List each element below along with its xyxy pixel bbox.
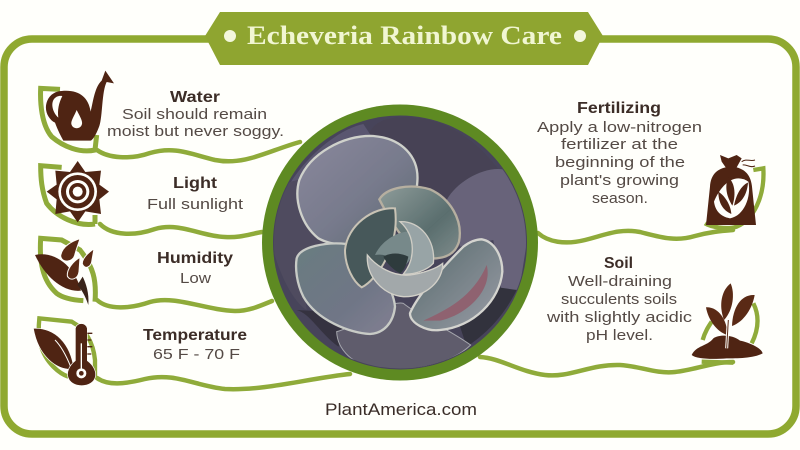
- item: fertilizing: plant's growing: [560, 172, 679, 189]
- connector: fertilizing: [538, 230, 733, 242]
- item: water: moist but never soggy.: [107, 123, 284, 140]
- text: humidity: Low: [180, 270, 211, 287]
- icon: sun: [41, 161, 109, 224]
- heading: water: Water: [170, 89, 220, 106]
- item: humidity: [35, 238, 233, 305]
- connector: light: [100, 224, 262, 237]
- text: soil: Well-draining: [568, 273, 672, 290]
- footer source: PlantAmerica.com: [325, 401, 477, 419]
- item: water: [41, 71, 284, 151]
- connector: water: [97, 142, 300, 161]
- icon: leaf and thermometer: [33, 318, 96, 386]
- lower left petal: [296, 243, 395, 334]
- heading: fertilizing: Fertilizing: [577, 100, 661, 117]
- heading: soil: Soil: [604, 255, 633, 272]
- center petals: [379, 187, 460, 258]
- connector: temperature: [97, 374, 350, 389]
- item: soil: with slightly acidic: [546, 309, 693, 326]
- back petals: [368, 117, 500, 240]
- icon: watering can: [41, 71, 114, 151]
- heading: temperature: Temperature: [143, 327, 247, 344]
- connector: soil: [480, 357, 733, 375]
- upper left petal: [297, 136, 417, 245]
- text: light: Full sunlight: [147, 196, 244, 213]
- text: water: Soil should remain: [122, 106, 267, 123]
- icon: sprout in soil: [692, 283, 763, 363]
- item: fertilizing: fertilizer at the: [561, 136, 678, 153]
- heading: light: Light: [173, 175, 217, 192]
- item: fertilizing: beginning of the: [555, 154, 685, 171]
- heading: humidity: Humidity: [157, 250, 233, 267]
- connector: humidity: [97, 300, 272, 311]
- icon: fertilizer bag: [705, 155, 763, 228]
- text: temperature: 65 F - 70 F: [153, 346, 240, 363]
- item: fertilizing: [537, 100, 763, 228]
- title banner: [205, 12, 603, 65]
- icon: leaves with drops: [35, 238, 95, 305]
- item: light: [41, 161, 244, 224]
- item: soil: succulents soils: [561, 291, 677, 308]
- text: fertilizing: Apply a low-nitrogen: [537, 119, 702, 136]
- item: temperature: [33, 318, 247, 386]
- lower right petal: [410, 239, 502, 330]
- item: soil: [546, 255, 763, 363]
- title banner: Echeveria Rainbow Care: [247, 21, 562, 50]
- item: soil: pH level.: [586, 327, 653, 344]
- item: fertilizing: season.: [592, 190, 648, 207]
- circular plant photo: [262, 104, 538, 380]
